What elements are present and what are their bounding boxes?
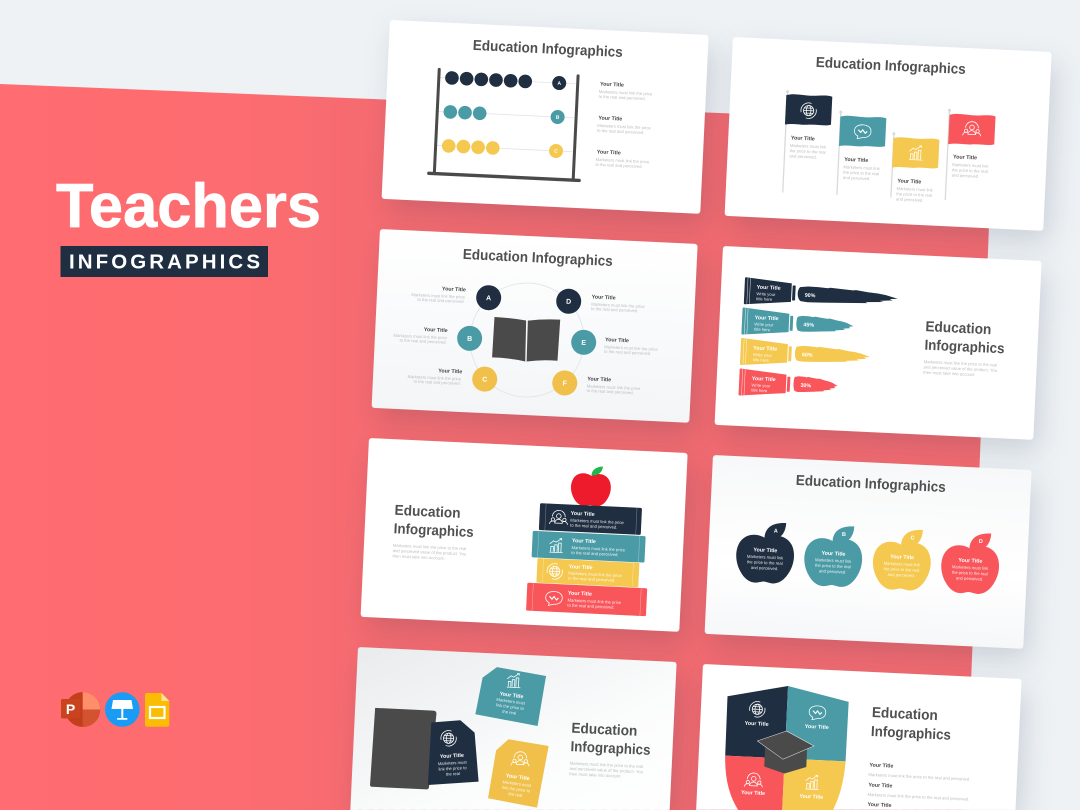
text block: abacus labels: Your Title bbox=[600, 81, 624, 89]
chart: shield: Your Title bbox=[741, 790, 765, 797]
nodes A-F: F bbox=[562, 380, 568, 388]
bar: 90% bbox=[744, 277, 898, 311]
panel: flags slide bbox=[725, 37, 1052, 231]
book: teal: Marketers must link the price bbox=[571, 545, 626, 553]
heading bbox=[393, 503, 475, 541]
flag: teal bbox=[837, 115, 886, 182]
heading: Education Infographics bbox=[795, 473, 946, 496]
card: teal note: Your Title bbox=[499, 691, 524, 700]
text block: right labels: to the real and perceived. bbox=[604, 349, 651, 356]
book: navy: Marketers must link the price bbox=[570, 518, 625, 525]
text block: Marketers must link the price to the real bbox=[570, 761, 643, 769]
panel: paint tubes slide bbox=[715, 246, 1042, 440]
flag: navy bbox=[783, 94, 832, 160]
flag: yellow: and perceived. bbox=[896, 196, 924, 203]
text block: list bbox=[867, 762, 971, 810]
apple B: the price to the real bbox=[815, 563, 851, 569]
card: navy note: link the price to bbox=[438, 765, 467, 772]
flag: teal: the price to the real bbox=[843, 170, 879, 176]
text block: list: Marketers must link the price to the real and perceived. bbox=[867, 792, 969, 802]
apple B: Marketers must link bbox=[815, 557, 852, 564]
heading: Education Infographics bbox=[462, 247, 613, 270]
book: navy: Your Title bbox=[571, 511, 595, 518]
text block: list: Marketers must link the price to the real and perceived. bbox=[868, 772, 970, 782]
card: yellow note: the real bbox=[508, 791, 523, 798]
text block: abacus labels: Your Title bbox=[597, 149, 621, 157]
apple C: Your Title bbox=[890, 554, 914, 561]
bar: 90%: 90% bbox=[805, 293, 816, 299]
chart: abacus: A bbox=[557, 81, 562, 87]
subtitle badge: Infographics bbox=[60, 246, 268, 277]
text block: Marketers must link the price to the real bbox=[924, 359, 997, 368]
apple A: and perceived. bbox=[751, 565, 778, 571]
heading bbox=[924, 319, 1006, 357]
book: teal: Your Title bbox=[572, 538, 596, 545]
flag: yellow: Your Title bbox=[897, 178, 921, 186]
chart: shield: Your Title bbox=[745, 721, 769, 728]
bar: 45%: title here bbox=[754, 327, 771, 332]
panel: book ring slide bbox=[372, 229, 698, 423]
text block: left labels: Marketers must link the price bbox=[411, 292, 466, 300]
chart: abacus: C bbox=[554, 149, 558, 155]
heading: Infographics bbox=[871, 724, 951, 744]
text block: right labels: to the real and perceived. bbox=[591, 306, 638, 313]
flag: red: Marketers must link bbox=[952, 162, 990, 169]
text block bbox=[923, 359, 998, 378]
book: red: Marketers must link the price bbox=[567, 598, 622, 605]
bar: 60%: title here bbox=[753, 357, 770, 363]
text block: left labels: to the real and perceived. bbox=[417, 297, 465, 304]
card: teal note: Marketers must bbox=[496, 697, 526, 706]
ring bbox=[467, 280, 587, 400]
text block: right labels: Your Title bbox=[605, 337, 629, 344]
text block: left labels: to the real and perceived. bbox=[399, 338, 447, 345]
flag: teal: and perceived. bbox=[843, 175, 871, 181]
flag: navy: Your Title bbox=[791, 135, 815, 142]
heading: Education bbox=[925, 319, 992, 338]
book: red: to the real and perceived. bbox=[567, 603, 615, 610]
book: teal bbox=[532, 531, 646, 563]
icon: red apple bbox=[570, 465, 612, 507]
text block: abacus labels: to the real and perceived. bbox=[597, 128, 644, 135]
card: navy note: Your Title bbox=[440, 753, 464, 760]
text block: list: Your Title bbox=[867, 802, 892, 809]
card: yellow note: Your Title bbox=[505, 773, 530, 782]
text block: and perceived value of the product. You bbox=[569, 766, 644, 774]
flag: yellow bbox=[890, 137, 939, 203]
icon: PowerPoint: P bbox=[66, 701, 75, 717]
text block: left labels: Your Title bbox=[442, 286, 466, 293]
flag: navy: the price to the real bbox=[790, 148, 826, 155]
flag poles bbox=[781, 90, 952, 200]
book: yellow bbox=[536, 558, 639, 587]
book: teal: to the real and perceived. bbox=[571, 550, 619, 557]
apple A: the price to the real bbox=[747, 559, 783, 566]
heading: Education Infographics bbox=[472, 38, 623, 61]
apple D: Marketers must link bbox=[952, 564, 989, 571]
nodes A-F: B bbox=[467, 336, 472, 343]
chart: abacus bbox=[429, 69, 584, 180]
card: navy note: the real bbox=[446, 771, 460, 777]
panel: shield slide bbox=[696, 664, 1022, 810]
book: red: Your Title bbox=[568, 591, 592, 598]
panel: abacus slide bbox=[382, 20, 709, 214]
card: navy note bbox=[428, 719, 481, 787]
text block: then must take into account. bbox=[392, 553, 445, 561]
bar: 45% bbox=[741, 307, 854, 340]
text block: right labels: Marketers must link the price bbox=[604, 344, 658, 352]
card: yellow note bbox=[488, 738, 549, 808]
bar: 30%: 30% bbox=[800, 383, 812, 389]
apple C: and perceived. bbox=[887, 572, 915, 578]
text block: left labels: Your Title bbox=[424, 327, 448, 334]
bar: 90%: Write your bbox=[756, 291, 776, 297]
icon: open book bbox=[492, 316, 560, 363]
text block: right labels: to the real and perceived. bbox=[587, 388, 634, 395]
apple A: A bbox=[774, 528, 778, 535]
icon: Keynote bbox=[105, 692, 140, 727]
apple A: Marketers must link bbox=[747, 554, 784, 560]
apple A bbox=[735, 521, 796, 584]
card: teal note: the real bbox=[502, 709, 517, 716]
text block: abacus labels bbox=[595, 81, 653, 169]
book: red bbox=[526, 583, 647, 616]
apple D: the price to the real bbox=[952, 570, 988, 576]
panel: stacked books slide bbox=[361, 438, 688, 632]
book: yellow: Marketers must link the price bbox=[568, 571, 623, 578]
card: teal note bbox=[475, 666, 546, 726]
flag: red: the price to the real bbox=[952, 167, 988, 174]
bar: 30% bbox=[738, 368, 838, 400]
text block: left labels: Marketers must link the price bbox=[393, 333, 448, 340]
heading: Infographics bbox=[570, 739, 651, 759]
text block: right labels: Your Title bbox=[587, 376, 611, 383]
bar: 90%: Your Title bbox=[757, 285, 781, 292]
nodes A-F: E bbox=[581, 340, 586, 347]
nodes A-F: C bbox=[482, 376, 487, 384]
apple B: and perceived. bbox=[819, 568, 846, 575]
icon: Google Slides bbox=[145, 693, 169, 727]
bar: 60%: Your Title bbox=[753, 346, 777, 353]
apple B bbox=[803, 524, 864, 588]
nodes A-F: A bbox=[486, 295, 491, 302]
text block: and perceived value of the product. You bbox=[923, 364, 998, 373]
text block: abacus labels: Marketers must link the price bbox=[597, 123, 652, 130]
heading bbox=[570, 721, 652, 759]
heading bbox=[871, 705, 952, 744]
text block: abacus labels: to the real and perceived. bbox=[599, 94, 646, 101]
bar: 60% bbox=[740, 338, 871, 371]
book: navy bbox=[539, 503, 642, 535]
flag: red: and perceived. bbox=[952, 173, 979, 179]
apple C bbox=[872, 528, 932, 591]
text block: abacus labels: Marketers must link the price bbox=[599, 89, 653, 96]
card: navy note: Marketers must bbox=[438, 760, 468, 766]
text block: abacus labels: Your Title bbox=[598, 115, 623, 123]
flag: navy: and perceived. bbox=[789, 153, 817, 160]
apple C: Marketers must link bbox=[884, 561, 921, 567]
text block: left labels bbox=[391, 284, 466, 386]
text block: right labels: Marketers must link the price bbox=[587, 384, 641, 391]
panel: apples slide bbox=[705, 455, 1032, 649]
subtitle badge: Infographics: INFOGRAPHICS bbox=[69, 251, 260, 274]
text block: left labels: Your Title bbox=[438, 368, 462, 375]
card: yellow note: link the price to bbox=[502, 785, 531, 794]
text block: right labels: Your Title bbox=[592, 294, 616, 301]
icon: graduation cap bbox=[756, 730, 815, 775]
text block: then must take into account. bbox=[569, 771, 622, 779]
heading: Education bbox=[872, 705, 938, 724]
text block: right labels bbox=[587, 294, 661, 396]
card: teal note: link the price to bbox=[496, 702, 525, 711]
text block: list: Your Title bbox=[869, 762, 894, 770]
text block: then must take into account. bbox=[923, 370, 976, 377]
heading: Education bbox=[394, 503, 461, 522]
flag: teal: Marketers must link bbox=[843, 164, 881, 171]
heading: Infographics bbox=[393, 521, 474, 541]
bar: 60%: Write your bbox=[753, 352, 773, 358]
nodes A-F: D bbox=[566, 299, 571, 306]
card: yellow note: Marketers must bbox=[502, 779, 532, 788]
bar: 30%: Your Title bbox=[752, 376, 776, 383]
apple B: Your Title bbox=[821, 551, 846, 558]
bar: 30%: title here bbox=[751, 387, 768, 393]
flag: navy: Marketers must link bbox=[790, 143, 827, 150]
bar: 90%: title here bbox=[756, 296, 773, 302]
flag: red: Your Title bbox=[953, 154, 977, 161]
heading: Education bbox=[571, 721, 638, 740]
apple D: Your Title bbox=[958, 558, 983, 565]
chart: abacus: B bbox=[556, 115, 560, 121]
apple C: C bbox=[910, 535, 915, 542]
text block: list: Your Title bbox=[868, 782, 893, 790]
book: yellow: to the real and perceived. bbox=[568, 576, 615, 583]
icon: dark folder bbox=[370, 708, 437, 790]
chart: shield bbox=[722, 683, 849, 810]
apple D bbox=[940, 531, 1001, 595]
flag: teal: Your Title bbox=[844, 157, 868, 164]
apple B: B bbox=[842, 532, 846, 538]
flag: yellow: Marketers must link bbox=[896, 186, 934, 193]
apple A: Your Title bbox=[753, 547, 777, 554]
text block: right labels: Marketers must link the price bbox=[591, 302, 645, 309]
icon: PowerPoint bbox=[61, 692, 100, 727]
apple D: D bbox=[979, 539, 983, 545]
nodes A-F bbox=[455, 284, 599, 397]
bar: 60%: 60% bbox=[802, 352, 813, 359]
chart: shield: Your Title bbox=[799, 794, 823, 801]
text block: left labels: Marketers must link the price bbox=[407, 374, 462, 382]
bar: 45%: Your Title bbox=[754, 315, 779, 322]
heading: Education Infographics bbox=[815, 55, 966, 78]
book: yellow: Your Title bbox=[568, 564, 593, 571]
bar: 45%: Write your bbox=[754, 322, 774, 327]
text block: left labels: to the real and perceived. bbox=[413, 379, 461, 386]
flag: yellow: the price to the real bbox=[896, 191, 932, 198]
text block: abacus labels: Marketers must link the price bbox=[596, 157, 650, 164]
bar: 45%: 45% bbox=[803, 322, 814, 329]
text block bbox=[569, 761, 644, 780]
apple D: and perceived. bbox=[956, 575, 983, 582]
apple C: the price to the real bbox=[883, 566, 920, 573]
text block: Marketers must link the price to the real bbox=[393, 543, 466, 551]
flag: red bbox=[947, 113, 996, 179]
heading: Infographics bbox=[924, 338, 1005, 357]
chart: shield: Your Title bbox=[805, 724, 829, 731]
text block: and perceived value of the product. You bbox=[393, 548, 467, 557]
book: navy: to the real and perceived. bbox=[570, 523, 617, 530]
text block bbox=[392, 543, 467, 562]
title: Teachers: Teachers bbox=[56, 172, 321, 241]
panel: folder slide bbox=[350, 647, 677, 810]
text block: abacus labels: to the real and perceived. bbox=[595, 162, 643, 169]
bar: 30%: Write your bbox=[751, 382, 771, 388]
